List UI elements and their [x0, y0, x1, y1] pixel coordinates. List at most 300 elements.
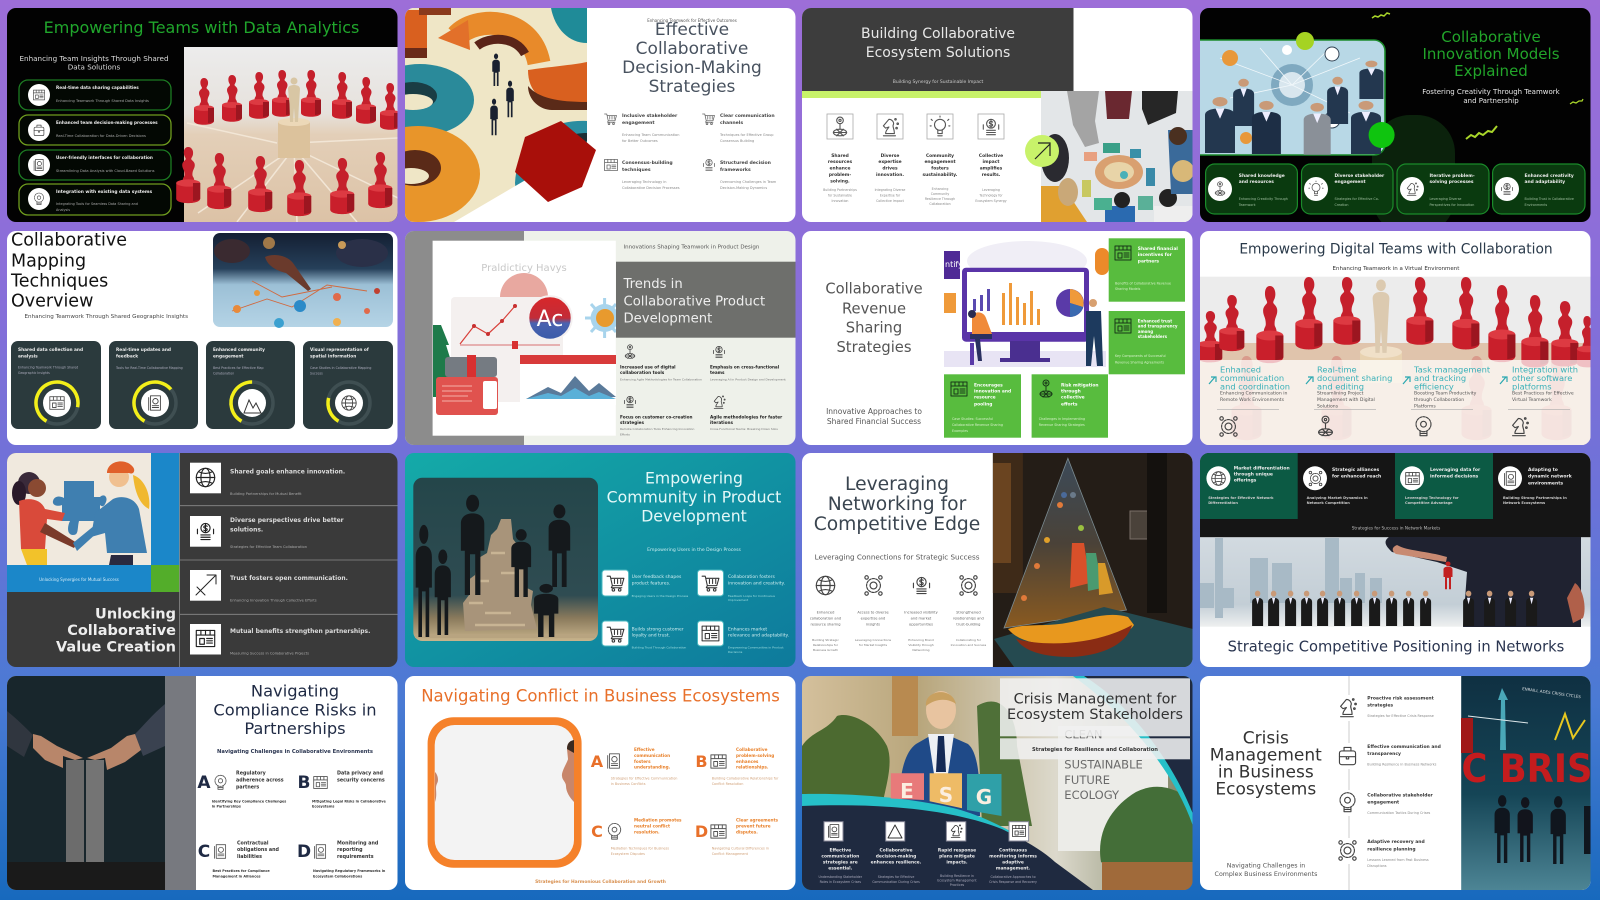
- item B: collaborative problem-solving: B: [695, 752, 708, 771]
- column: integration with software: [1500, 365, 1578, 436]
- box: shared financial incentives: partners: [1138, 259, 1159, 265]
- box: encourages innovation: Case Studies: Successful: [952, 417, 993, 421]
- illustration: business team and network: [1198, 40, 1385, 155]
- item D: monitoring and reporting: D: [297, 842, 311, 862]
- item D: clear agreements: D: [695, 822, 708, 841]
- heading: Leveraging: [845, 474, 949, 495]
- column: real-time document sharing: document sharing: [1317, 373, 1392, 383]
- column: task management: and tracking: [1414, 373, 1466, 383]
- item D: monitoring and reporting: Monitoring and: [337, 840, 379, 846]
- row: diverse perspectives: Strategies for Effective Team Collaboration: [230, 545, 307, 549]
- item: customer co-creation: strategies: [620, 420, 644, 425]
- ESG cards: S: [939, 783, 953, 807]
- column: rapid response: plans mitigate: [939, 853, 975, 859]
- card: adapting to dynamic environments: dynamic network: [1528, 474, 1573, 480]
- column: diverse expertise: Collective Impact: [876, 199, 905, 203]
- dark header: [1200, 453, 1591, 537]
- item A: effective communication: understanding.: [634, 765, 671, 770]
- item B: data privacy: security concerns: [337, 778, 385, 784]
- item A: effective communication: A: [591, 752, 604, 771]
- item D: clear agreements: Navigating Cultural Differences in: [712, 846, 769, 850]
- column: access to expertise: [855, 576, 892, 647]
- card: market differentiation: Market differentiation: [1234, 466, 1290, 472]
- card: visual representation: Success: [310, 372, 323, 376]
- row: trust: Enhancing Innovation Through Collective Efforts: [230, 598, 317, 602]
- column: community engagement: engagement: [924, 159, 956, 165]
- row: trust: [190, 570, 348, 602]
- grey strip: [165, 676, 196, 890]
- item: agile methodologies: iterations: [710, 420, 733, 425]
- grey side strip: [405, 231, 524, 445]
- row: mutual benefits: Mutual benefits strengthen partnerships.: [230, 628, 370, 635]
- subtitle: Fostering Creativity Through Teamwork: [1422, 88, 1561, 96]
- item: market relevance: Decisions: [728, 650, 743, 654]
- heading: Techniques: [10, 272, 108, 292]
- column: enhanced collaboration: Enhanced: [817, 610, 834, 614]
- column: rapid response: Rapid response: [938, 847, 976, 853]
- item D: monitoring and reporting: Ecosystem Collaborations: [313, 874, 362, 878]
- card: diverse stakeholder: Strategies for Effective Co-: [1334, 197, 1380, 201]
- item D: monitoring and reporting: reporting: [337, 847, 363, 853]
- card: enhanced community engagement: Collaboration: [213, 372, 234, 376]
- item B: data privacy: Mitigating Legal Risks in Collaborative: [312, 800, 386, 804]
- illustration: presenter at analytics monitor: [944, 241, 1109, 367]
- box: risk mitigation: collective: [1061, 395, 1085, 401]
- box: risk mitigation: [1032, 374, 1108, 438]
- column: increased visibility: opportunities: [909, 622, 933, 626]
- row: shared goals: Shared goals enhance innovation.: [230, 468, 345, 476]
- box: encourages innovation: Encourages: [974, 382, 1003, 388]
- panel: Empowering Teams with Data Analytics: [7, 8, 400, 222]
- column: enhanced collaboration: [810, 576, 841, 652]
- illustration: two people holding a puzzle piece: [7, 453, 151, 565]
- list item: enhanced decision-making: Enhanced team decision-making processes: [56, 120, 158, 125]
- green block: [151, 565, 180, 592]
- illustration: product analytics dashboard: [433, 241, 619, 436]
- list item: real-time data sharing: Real-time data sharing capabilities: [56, 85, 139, 90]
- item: structured decision frameworks: frameworks: [720, 167, 751, 173]
- heading: Building Collaborative: [861, 26, 1015, 42]
- heading: Crisis: [1243, 728, 1289, 748]
- column: integration with software: platforms: [1512, 382, 1552, 392]
- column: enhanced collaboration: collaboration and: [810, 616, 841, 620]
- row: diverse perspectives: solutions.: [230, 526, 263, 534]
- item: market relevance: [698, 621, 789, 654]
- item C: contractual obligations: C: [198, 842, 210, 862]
- card: leveraging data: [1395, 453, 1493, 519]
- column: real-time document sharing: and editing: [1317, 382, 1364, 392]
- item: collaboration fosters innovation: innovation and creativity.: [728, 580, 785, 586]
- photo: man holding ESG cards among plants: CLEAN: [1064, 727, 1102, 741]
- kicker text: Innovations Shaping Teamwork in Product Design: [624, 245, 760, 251]
- card: adapting to dynamic environments: Adapting to: [1528, 467, 1558, 473]
- item D: clear agreements: [695, 817, 778, 856]
- heading: Partnerships: [244, 719, 346, 738]
- card: shared knowledge: Teamwork: [1238, 203, 1256, 207]
- heading: Navigating Conflict in Business Ecosystems: [421, 687, 780, 706]
- column: real-time document sharing: Solutions: [1317, 404, 1339, 410]
- card: enhanced creativity: [1493, 164, 1585, 214]
- item: collaborative stakeholder engagement: Collaborative stakeholder: [1367, 792, 1434, 798]
- photo: men stacking puzzle pieces: [413, 478, 598, 641]
- row: mutual benefits: Measuring Success in Collaborative Projects: [230, 652, 309, 656]
- column: shared resources: solving.: [830, 178, 850, 184]
- row: diverse perspectives: Diverse perspectives drive better: [230, 517, 344, 524]
- item D: monitoring and reporting: [297, 840, 386, 878]
- item: inclusive stakeholder engagement: [604, 113, 679, 143]
- panel: Collaborative Mapping Techniques Overview: [7, 231, 398, 445]
- list item: enhanced decision-making: [19, 115, 171, 145]
- item: user feedback: [602, 570, 689, 598]
- heading: Unlocking: [95, 606, 176, 622]
- card: diverse stakeholder: Diverse stakeholder: [1334, 173, 1385, 179]
- card: shared knowledge: Enhancing Creativity Through: [1239, 197, 1288, 201]
- column: diverse expertise: drives: [882, 166, 898, 172]
- item D: monitoring and reporting: Navigating Regulatory Frameworks in: [313, 869, 386, 873]
- column: access to expertise: for Market Insights: [859, 643, 887, 647]
- item: cross-functional teams: Emphasis on cross-functional: [710, 365, 780, 370]
- panel: Building Collaborative Ecosystem Solutions: [802, 8, 1194, 222]
- item C: contractual obligations: liabilities: [237, 854, 262, 860]
- column: task management: [1403, 365, 1491, 436]
- item: adaptive recovery: Adaptive recovery and: [1367, 839, 1425, 845]
- column: effective communication: Roles in Ecosystem Crises: [820, 880, 861, 884]
- card: strategic alliances: Strategic alliances: [1332, 467, 1379, 473]
- column: collective impact: Ecosystem Synergy: [975, 199, 1007, 203]
- panel: Collaborative Innovation Models Explained: [1198, 8, 1591, 235]
- item: builds loyalty: loyalty and trust.: [632, 633, 670, 639]
- heading: Value Creation: [56, 640, 176, 656]
- heading banner: Collaborative Product: [624, 295, 765, 310]
- column: integration with software: Virtual Teamwork: [1512, 397, 1552, 403]
- card: shared data collection: Shared data collection and: [18, 347, 83, 353]
- card: market differentiation: through unique: [1234, 472, 1273, 478]
- column: effective communication: Effective: [830, 847, 851, 853]
- heading: Effective: [655, 20, 729, 40]
- card: shared knowledge: [1206, 164, 1297, 214]
- column: diverse expertise: expertise: [878, 159, 902, 165]
- card: enhanced creativity: Building Trust in Collaborative: [1524, 197, 1574, 201]
- column: real-time document sharing: Streamlining Project: [1317, 390, 1364, 396]
- item: adaptive recovery: resilience planning: [1367, 846, 1416, 852]
- item: builds loyalty: [602, 621, 686, 650]
- item B: collaborative problem-solving: relationships.: [736, 765, 769, 770]
- heading: Navigating: [251, 682, 339, 701]
- item A: effective communication: Strategies for Effective Communication: [611, 776, 677, 780]
- item: builds loyalty: Builds strong customer: [632, 626, 684, 632]
- card: enhanced community engagement: Best Practices for Effective Map: [213, 366, 264, 370]
- heading: Empowering: [645, 468, 743, 487]
- column: community engagement: Collaboration: [929, 202, 951, 206]
- box: encourages innovation: Examples: [952, 429, 968, 433]
- column: continuous monitoring: [989, 822, 1037, 884]
- box: risk mitigation: Risk mitigation: [1061, 382, 1098, 388]
- column: collective impact: Leveraging: [982, 188, 1000, 192]
- column: community engagement: fosters: [931, 166, 949, 172]
- card: leveraging data: Leveraging data for: [1430, 467, 1481, 473]
- heading: Mapping: [11, 252, 86, 272]
- list item: enhanced decision-making: Real-Time Collaboration for Data-Driven Decisions: [56, 134, 146, 138]
- column: effective communication: strategies are: [823, 859, 858, 865]
- item: proactive risk assessment: strategies: [1367, 703, 1393, 709]
- column: shared resources: Innovation: [832, 199, 848, 203]
- column: shared resources: resources: [828, 159, 853, 165]
- item: collaborative stakeholder engagement: Communication Tactics During Crises: [1367, 811, 1431, 815]
- box: shared financial incentives: [1109, 238, 1185, 302]
- card: iterative problem-solving: [1397, 164, 1489, 214]
- column: diverse expertise: innovation.: [876, 172, 904, 178]
- card: market differentiation: offerings: [1234, 477, 1257, 483]
- box: enhanced trust: among: [1138, 329, 1153, 334]
- card: diverse stakeholder: engagement: [1334, 179, 1366, 185]
- item C: contractual obligations: obligations and: [237, 847, 280, 853]
- photo: team seen from above: [1041, 91, 1194, 222]
- panel: Leveraging Networking for Competitive Edge: [802, 453, 1193, 667]
- column: collaborative decision-making: Strategies for Effective: [878, 875, 914, 879]
- item: inclusive stakeholder engagement: Inclusive stakeholder: [622, 113, 678, 119]
- item A: regulatory adherence: adherence across: [236, 778, 284, 784]
- row: shared goals: Building Partnerships for Mutual Benefit: [230, 492, 302, 496]
- green dot: [1369, 122, 1395, 148]
- item B: collaborative problem-solving: [695, 747, 779, 786]
- list item: user-friendly interfaces: User-friendly interfaces for collaboration: [56, 155, 153, 160]
- card: shared data collection: Geographic Insights: [18, 371, 50, 375]
- box: risk mitigation: through: [1061, 389, 1081, 395]
- dark title block: [802, 8, 1074, 91]
- item: inclusive stakeholder engagement: engagement: [622, 120, 655, 126]
- subtitle panel: Strategies for Resilience and Collaboration: [1032, 747, 1158, 753]
- card: visual representation: spatial information: [310, 354, 356, 360]
- subtitle panel: [1000, 738, 1190, 759]
- item: agile methodologies: Cross-Functional Teams: Breaking Down Silos: [710, 427, 778, 431]
- column: collaborative decision-making: Collaborative: [880, 847, 912, 853]
- card: shared data collection: [11, 341, 101, 432]
- heading banner: Trends in: [622, 277, 683, 292]
- card: visual representation: Visual representation of: [310, 347, 369, 353]
- heading: Strategies: [836, 339, 912, 356]
- column: shared resources: Building Partnerships: [823, 188, 857, 192]
- box: shared financial incentives: Sharing Models: [1115, 287, 1141, 291]
- column: rapid response: impacts.: [946, 859, 968, 865]
- item: customer co-creation: Efforts: [620, 432, 630, 436]
- card: real-time updates: feedback: [116, 354, 138, 360]
- photo: red pawns with faded lower area: [1198, 277, 1597, 445]
- item B: data privacy: B: [298, 773, 310, 793]
- item C: contractual obligations: Best Practices for Compliance: [212, 869, 270, 873]
- row: mutual benefits: [190, 624, 370, 656]
- panel: Navigating Compliance Risks in Partnerships: [7, 676, 398, 890]
- illustration: presenter at analytics monitor: ntify: [945, 260, 963, 269]
- item: agile methodologies: Agile methodologies for faster: [710, 415, 783, 420]
- column: shared resources: enhance: [830, 166, 850, 172]
- column: enhanced communication: communication: [1220, 373, 1284, 383]
- heading: Collaborative: [11, 231, 127, 251]
- list item: integration with data systems: Analysis: [56, 208, 70, 212]
- item: inclusive stakeholder engagement: for Better Outcomes: [622, 139, 658, 143]
- column: access to expertise: insights: [866, 622, 880, 626]
- item: customer co-creation: Focus on customer co-creation: [620, 415, 692, 420]
- column: integration with software: Integration with: [1512, 365, 1578, 375]
- heading: Management: [1210, 745, 1322, 765]
- heading: Explained: [1454, 62, 1528, 80]
- row: diverse perspectives: [190, 516, 344, 549]
- column: diverse expertise: [875, 114, 905, 203]
- column: effective communication: [819, 822, 863, 884]
- panel: Strategic Competitive Positioning in Networks: [1200, 453, 1591, 667]
- item: digital collaboration tools: [620, 345, 702, 382]
- column: diverse expertise: Expertise for: [880, 194, 901, 198]
- photo: hands bridging a split stone pillar: [7, 676, 165, 890]
- item A: regulatory adherence: A: [197, 773, 211, 793]
- item B: collaborative problem-solving: Collaborative: [736, 747, 768, 752]
- item C: mediation: Mediation promotes: [634, 817, 682, 822]
- panel: Crisis Management for Ecosystem Stakeholders: [802, 676, 1193, 890]
- item: adaptive recovery: [1335, 838, 1429, 868]
- column: diverse expertise: Diverse: [881, 153, 899, 159]
- photo: man holding ESG cards among plants: FUTURE: [1064, 773, 1110, 787]
- blue caption band: [7, 565, 151, 592]
- item B: collaborative problem-solving: Conflict Resolution: [712, 782, 743, 786]
- column: enhanced communication: Enhancing Communication in: [1220, 390, 1287, 396]
- card: market differentiation: Strategies for Effective Network: [1208, 496, 1274, 500]
- illustration: product analytics dashboard: Praldicticy Havys: [481, 263, 567, 274]
- box: encourages innovation: [944, 374, 1021, 438]
- column: strengthened relationships: trust-building: [956, 622, 980, 626]
- column: rapid response: Building Resilience in: [940, 874, 974, 878]
- column: continuous monitoring: Collaborative Approaches to: [990, 875, 1036, 879]
- heading: Development: [641, 507, 747, 526]
- item C: contractual obligations: [198, 840, 280, 878]
- card: real-time updates: Tools for Real-Time Collaborative Mapping: [115, 366, 183, 370]
- column: integration with software: other software: [1512, 373, 1572, 383]
- box: encourages innovation: innovation and: [974, 389, 1011, 395]
- item: consensus-building techniques: Leveraging Technology in: [622, 180, 667, 184]
- card: real-time updates: [109, 341, 198, 432]
- box: enhanced trust: [1109, 311, 1185, 374]
- item: proactive risk assessment: [1335, 695, 1435, 721]
- subtitle: Data Solutions: [68, 62, 120, 72]
- item: structured decision frameworks: Overcoming Challenges in Team: [720, 180, 777, 184]
- column: effective communication: Understanding Stakeholder: [819, 875, 863, 879]
- column: rapid response: [937, 822, 977, 887]
- list item: integration with data systems: Integration with existing data systems: [56, 189, 152, 195]
- row: shared goals: [190, 463, 345, 496]
- card: enhanced community engagement: Enhanced community: [213, 347, 265, 353]
- photo: executives facing a red crisis sign: ENRAILL ADES CRISIS CYCLES: [1522, 686, 1582, 699]
- kicker text: Enhancing Teamwork for Effective Outcomes: [647, 18, 737, 23]
- card: diverse stakeholder: Creation: [1334, 203, 1348, 207]
- panel: Navigating Conflict in Business Ecosystems: [405, 676, 796, 890]
- column: access to expertise: Access to diverse: [857, 610, 889, 614]
- item: digital collaboration tools: collaboration tools: [620, 370, 665, 375]
- item B: collaborative problem-solving: problem-solving: [736, 753, 774, 758]
- column: collective impact: [975, 114, 1007, 203]
- card: adapting to dynamic environments: environments: [1528, 481, 1563, 487]
- heading: Empowering Digital Teams with Collaboration: [1239, 241, 1553, 257]
- column: increased visibility: Enhancing Brand: [908, 638, 934, 642]
- subtitle: Navigating Challenges in Collaborative Environments: [217, 749, 373, 755]
- item: digital collaboration tools: Increased use of digital: [620, 365, 676, 370]
- item C: contractual obligations: Contractual: [237, 840, 269, 846]
- column: diverse expertise: Integrating Diverse: [875, 188, 905, 192]
- card: adapting to dynamic environments: Network Ecosystems: [1503, 501, 1545, 505]
- heading: Ecosystems: [1215, 779, 1316, 799]
- column: task management: Boosting Team Productivity: [1414, 390, 1477, 396]
- item: consensus-building techniques: Consensus-building: [622, 160, 673, 166]
- column: enhanced collaboration: resource sharing: [810, 622, 841, 626]
- heading: Community in Product: [607, 487, 781, 506]
- item: clear communication channels: Clear communication: [720, 113, 775, 119]
- heading: Ecosystem Solutions: [866, 45, 1010, 61]
- item C: mediation: [591, 817, 682, 856]
- item: structured decision frameworks: Structured decision: [720, 160, 771, 166]
- panel: Empowering Community in Product Development: [405, 453, 796, 667]
- item: clear communication channels: [702, 113, 775, 143]
- card: strategic alliances: for enhanced reach: [1332, 474, 1381, 480]
- item B: data privacy: Ecosystems: [312, 804, 334, 808]
- column: task management: Platforms: [1414, 404, 1436, 410]
- column: increased visibility: Networking: [912, 648, 930, 652]
- heading: Networking for: [828, 494, 967, 515]
- item: collaboration fosters innovation: [698, 570, 785, 602]
- card: iterative problem-solving: Perspectives for Innovation: [1430, 203, 1474, 207]
- box: encourages innovation: Collaborative Revenue Sharing: [952, 423, 1003, 427]
- card: enhanced community engagement: [206, 341, 295, 432]
- heading banner: [616, 262, 796, 338]
- column: shared resources: for Sustainable: [828, 194, 852, 198]
- column: community engagement: [923, 114, 958, 206]
- card: adapting to dynamic environments: Building Strong Partnerships in: [1503, 496, 1567, 500]
- column: integration with software: Best Practices for Effective: [1512, 390, 1574, 396]
- column: rapid response: Ecosystem Management: [937, 878, 977, 882]
- heading: Strategic Competitive Positioning in Networks: [1228, 639, 1564, 656]
- column: enhanced communication: and coordination: [1220, 382, 1290, 392]
- item: collaboration fosters innovation: Feedback Loops for Continuous: [728, 594, 775, 598]
- heading: in Business: [1218, 763, 1314, 783]
- item: customer co-creation: Remote Collaboration Tools Enhancing Innovation: [620, 427, 694, 431]
- title panel: [1000, 678, 1190, 736]
- subtitle: Navigating Challenges in: [1227, 863, 1305, 870]
- card: shared data collection: Enhancing Teamwork Through Shared: [18, 366, 78, 370]
- heading: Collaborative: [1441, 28, 1541, 46]
- subtitle: Enhancing Teamwork in a Virtual Environment: [1333, 266, 1460, 272]
- column: collaborative decision-making: decision-making: [876, 853, 916, 859]
- column: collaborative decision-making: enhances resilience.: [871, 859, 922, 865]
- heading: Overview: [11, 292, 93, 312]
- column: strengthened relationships: [951, 576, 987, 647]
- panel: Effective Collaborative Decision-Making Strategies: [405, 8, 796, 222]
- column: strengthened relationships: Innovation and Success: [951, 643, 987, 647]
- list item: integration with data systems: Integrating Tools for Seamless Data Sharing and: [56, 202, 138, 206]
- heading: Innovation Models: [1422, 45, 1560, 63]
- item: consensus-building techniques: [605, 159, 680, 190]
- column: strengthened relationships: relationships and: [953, 616, 984, 620]
- list item: real-time data sharing: [19, 80, 171, 110]
- item D: clear agreements: prevent future: [736, 823, 771, 828]
- column: increased visibility: and market: [911, 616, 932, 620]
- subtitle: Enhancing Team Insights Through Shared: [19, 54, 169, 63]
- item: communication and transparency: Effective communication and: [1367, 744, 1441, 750]
- item: cross-functional teams: teams: [710, 370, 725, 375]
- card: strategic alliances: Analyzing Market Dynamics in: [1307, 496, 1368, 500]
- column: collective impact: Collective: [979, 153, 1003, 159]
- item C: mediation: resolution.: [634, 829, 660, 834]
- box: enhanced trust: Enhanced trust: [1138, 319, 1172, 324]
- item: proactive risk assessment: Strategies for Effective Crisis Response: [1367, 714, 1434, 718]
- heading: Strategies: [649, 77, 736, 97]
- panel: Empowering Digital Teams with Collaboration: [1198, 231, 1597, 445]
- heading: Revenue: [842, 300, 906, 317]
